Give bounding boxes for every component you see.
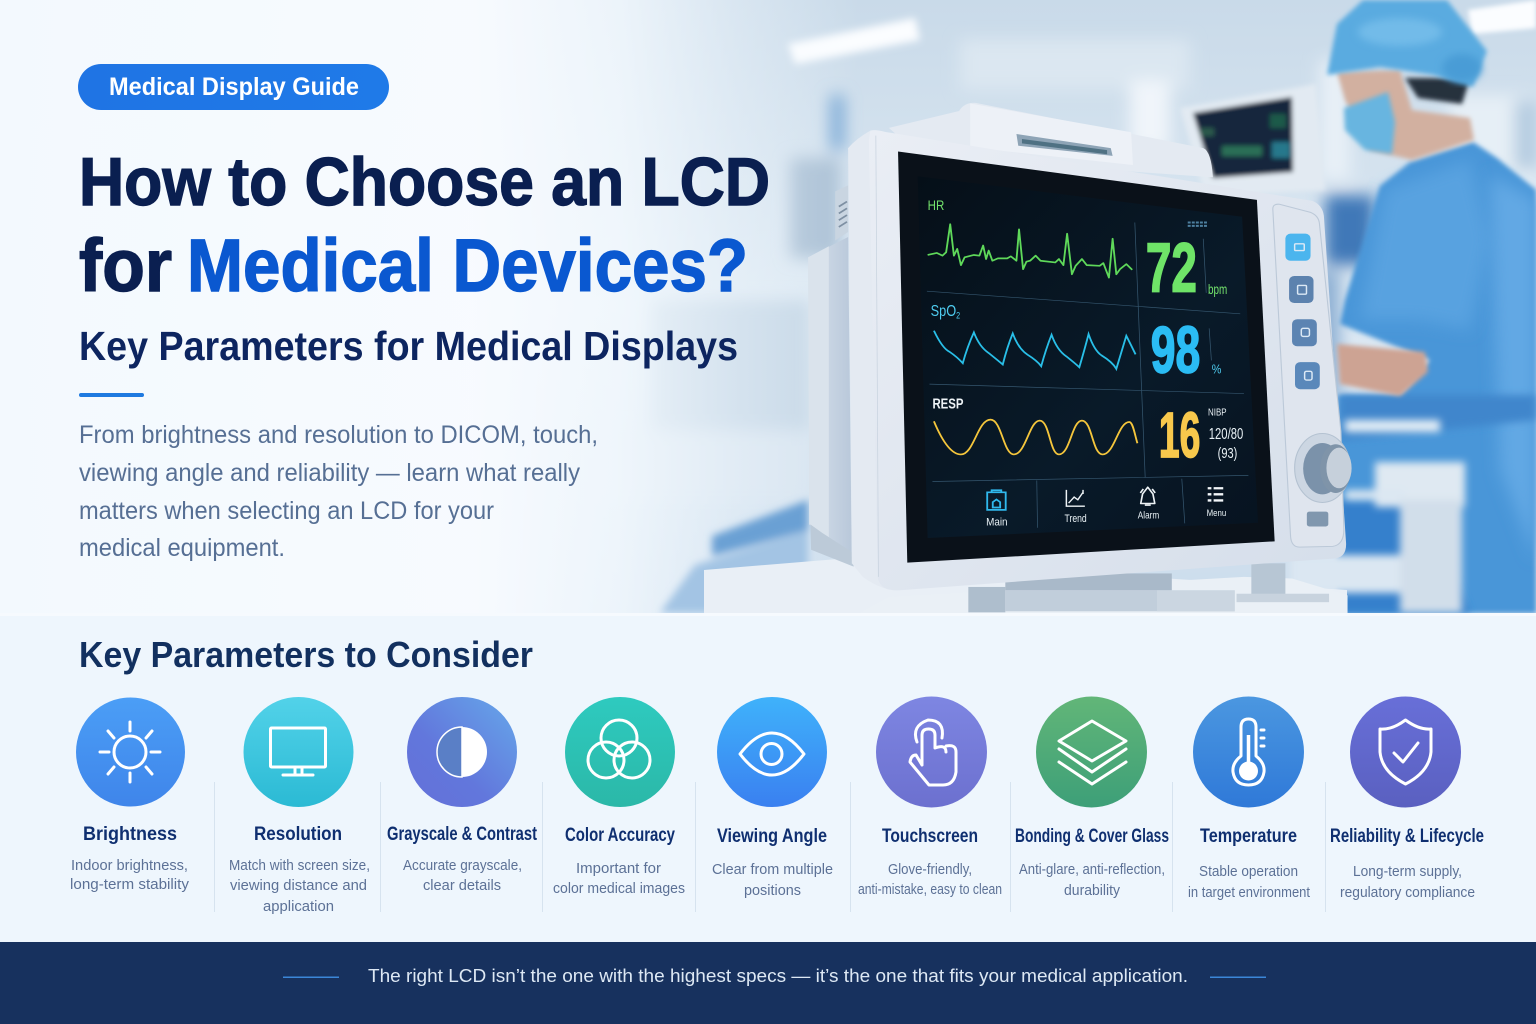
parameter: Brightness: Indoor brightness, — [71, 858, 188, 874]
parameter: Resolution: viewing distance and — [230, 878, 367, 894]
monitor left side housing — [808, 131, 889, 590]
parameter: Brightness: long-term stability — [70, 877, 190, 893]
RESP label: RESP — [932, 396, 964, 412]
nav: Alarm — [1138, 487, 1159, 522]
parameter: Touchscreen: Touchscreen — [882, 826, 978, 847]
nav: Trend: Trend — [1065, 513, 1087, 525]
parameter: Temperature: Temperature — [1200, 826, 1297, 847]
icon: thermometer — [1193, 696, 1304, 808]
screen date stamp — [1188, 223, 1207, 226]
parameter: Temperature: Stable operation — [1199, 864, 1298, 880]
icon: overlapping circles — [565, 697, 675, 807]
parameter: Bonding & Cover Glass: durability — [1064, 883, 1121, 899]
nav: Main — [986, 490, 1008, 528]
monitor bezel — [898, 152, 1275, 563]
ceiling light left — [788, 18, 920, 64]
parameter: Viewing Angle: Viewing Angle — [717, 826, 827, 847]
parameter: Brightness — [70, 698, 190, 893]
percent label: % — [1212, 362, 1221, 376]
parameter: Color Accuracy: color medical images — [553, 881, 685, 897]
illustration: patient monitor — [808, 103, 1352, 617]
parameter: Grayscale & Contrast: Grayscale & Contrast — [387, 824, 538, 845]
table under monitor — [704, 558, 1347, 613]
nav: Trend — [1065, 490, 1087, 525]
nav: Menu: Menu — [1207, 508, 1226, 519]
NIBP values: 120/80 — [1209, 426, 1243, 443]
parameter: Reliability & Lifecycle — [1330, 696, 1484, 901]
SpO2 label: 2 — [956, 311, 960, 320]
NIBP label: NIBP — [1208, 407, 1227, 418]
small power button — [1307, 512, 1328, 526]
intro paragraph: matters when selecting an LCD for your — [79, 497, 494, 525]
panel: key parameters — [0, 613, 1536, 942]
parameter: Viewing Angle — [712, 697, 833, 899]
parameter: Viewing Angle: Clear from multiple — [712, 862, 833, 878]
parameter: Grayscale & Contrast: Accurate grayscale, — [403, 858, 522, 874]
parameter: Grayscale & Contrast: clear details — [423, 878, 501, 894]
intro paragraph — [79, 421, 598, 562]
screen grid lines — [927, 223, 1248, 528]
footer banner: The right LCD isn’t the one with the highest specs — it’s the one that fits your medical application. — [368, 965, 1188, 986]
parameter: Reliability & Lifecycle: regulatory compliance — [1340, 885, 1475, 901]
side control panel — [1273, 204, 1344, 547]
parameter: Resolution: Resolution — [254, 824, 342, 845]
monitor stand — [852, 563, 1348, 617]
button 1 — [1285, 234, 1311, 261]
monitor screen — [918, 176, 1258, 538]
intro paragraph: viewing angle and reliability — learn what really — [79, 459, 580, 487]
blurred nurse — [1327, 0, 1536, 613]
HR label: HR — [928, 199, 944, 214]
blurred blue counter lower left — [660, 500, 808, 613]
HR value: 72 — [1146, 229, 1197, 307]
parameter: Bonding & Cover Glass: Anti-glare, anti-reflection, — [1019, 862, 1165, 878]
control knob — [1295, 433, 1352, 502]
blurred room structures — [659, 40, 1536, 429]
RESP value: 16 — [1159, 400, 1200, 471]
parameter: Bonding & Cover Glass: Bonding & Cover Glass — [1015, 826, 1169, 847]
nav: Main: Main — [986, 516, 1008, 528]
parameter: Touchscreen: anti-mistake, easy to clean — [858, 882, 1002, 898]
parameter: Color Accuracy — [553, 697, 685, 897]
nav: Alarm: Alarm — [1138, 510, 1159, 522]
parameter: Reliability & Lifecycle: Long-term supply, — [1353, 864, 1462, 880]
icon: pointing hand — [876, 696, 987, 808]
blurred background monitor — [1180, 84, 1325, 196]
nav: Menu — [1207, 488, 1226, 519]
button 4 — [1295, 362, 1320, 389]
parameter: Color Accuracy: Important for — [576, 861, 661, 877]
icon: stacked layers — [1036, 696, 1147, 808]
icon: shield with check — [1350, 696, 1461, 808]
title line 1: How to Choose an LCD — [79, 144, 770, 220]
badge: Medical Display Guide — [78, 64, 389, 110]
icon: eye — [717, 697, 827, 807]
parameter: Brightness: Brightness — [83, 824, 177, 845]
button 2 — [1289, 276, 1314, 303]
RESP waveform — [934, 420, 1137, 454]
monitor handle — [889, 103, 1213, 177]
button glyphs — [1295, 244, 1312, 380]
parameter: Reliability & Lifecycle: Reliability & Lifecycle — [1330, 826, 1484, 847]
badge: Medical Display Guide: Medical Display Guide — [109, 73, 359, 101]
parameter: Bonding & Cover Glass — [1015, 696, 1169, 899]
SpO2 waveform — [934, 331, 1136, 369]
parameter: Grayscale & Contrast — [387, 697, 538, 894]
title line 2: for — [79, 224, 172, 307]
blurred white equipment at right — [1290, 420, 1465, 613]
left fade overlay — [0, 0, 860, 613]
icon: sun — [76, 698, 185, 806]
parameter: Resolution: application — [263, 899, 334, 915]
SpO2 value: 98 — [1151, 313, 1200, 387]
footer banner — [0, 942, 1536, 1024]
parameter: Resolution — [229, 697, 370, 915]
bpm label: bpm — [1208, 283, 1227, 298]
parameter: Temperature — [1188, 696, 1310, 901]
monitor front face — [869, 130, 1346, 590]
intro paragraph: From brightness and resolution to DICOM, touch, — [79, 421, 598, 449]
HR waveform — [928, 224, 1132, 278]
parameter: Touchscreen: Glove-friendly, — [888, 862, 972, 878]
subtitle: Key Parameters for Medical Displays — [79, 323, 738, 369]
ceiling light right — [1468, 0, 1536, 34]
parameter: Color Accuracy: Color Accuracy — [565, 825, 675, 846]
title highlight: Medical Devices? — [187, 224, 748, 307]
intro paragraph: medical equipment. — [79, 534, 285, 562]
parameter: Touchscreen — [858, 696, 1002, 898]
parameter: Viewing Angle: positions — [744, 883, 801, 899]
illustration: patient monitor: (93) — [1218, 445, 1237, 462]
SpO2 label: SpO — [931, 302, 965, 320]
parameter: Resolution: Match with screen size, — [229, 858, 370, 874]
parameter: Temperature: in target environment — [1188, 885, 1310, 901]
icon: contrast — [407, 697, 517, 807]
button 3 — [1292, 319, 1317, 346]
heading: Key Parameters to Consider — [79, 634, 533, 675]
panel: hero background hospital scene — [318, 0, 1536, 613]
icon: display — [244, 697, 354, 807]
